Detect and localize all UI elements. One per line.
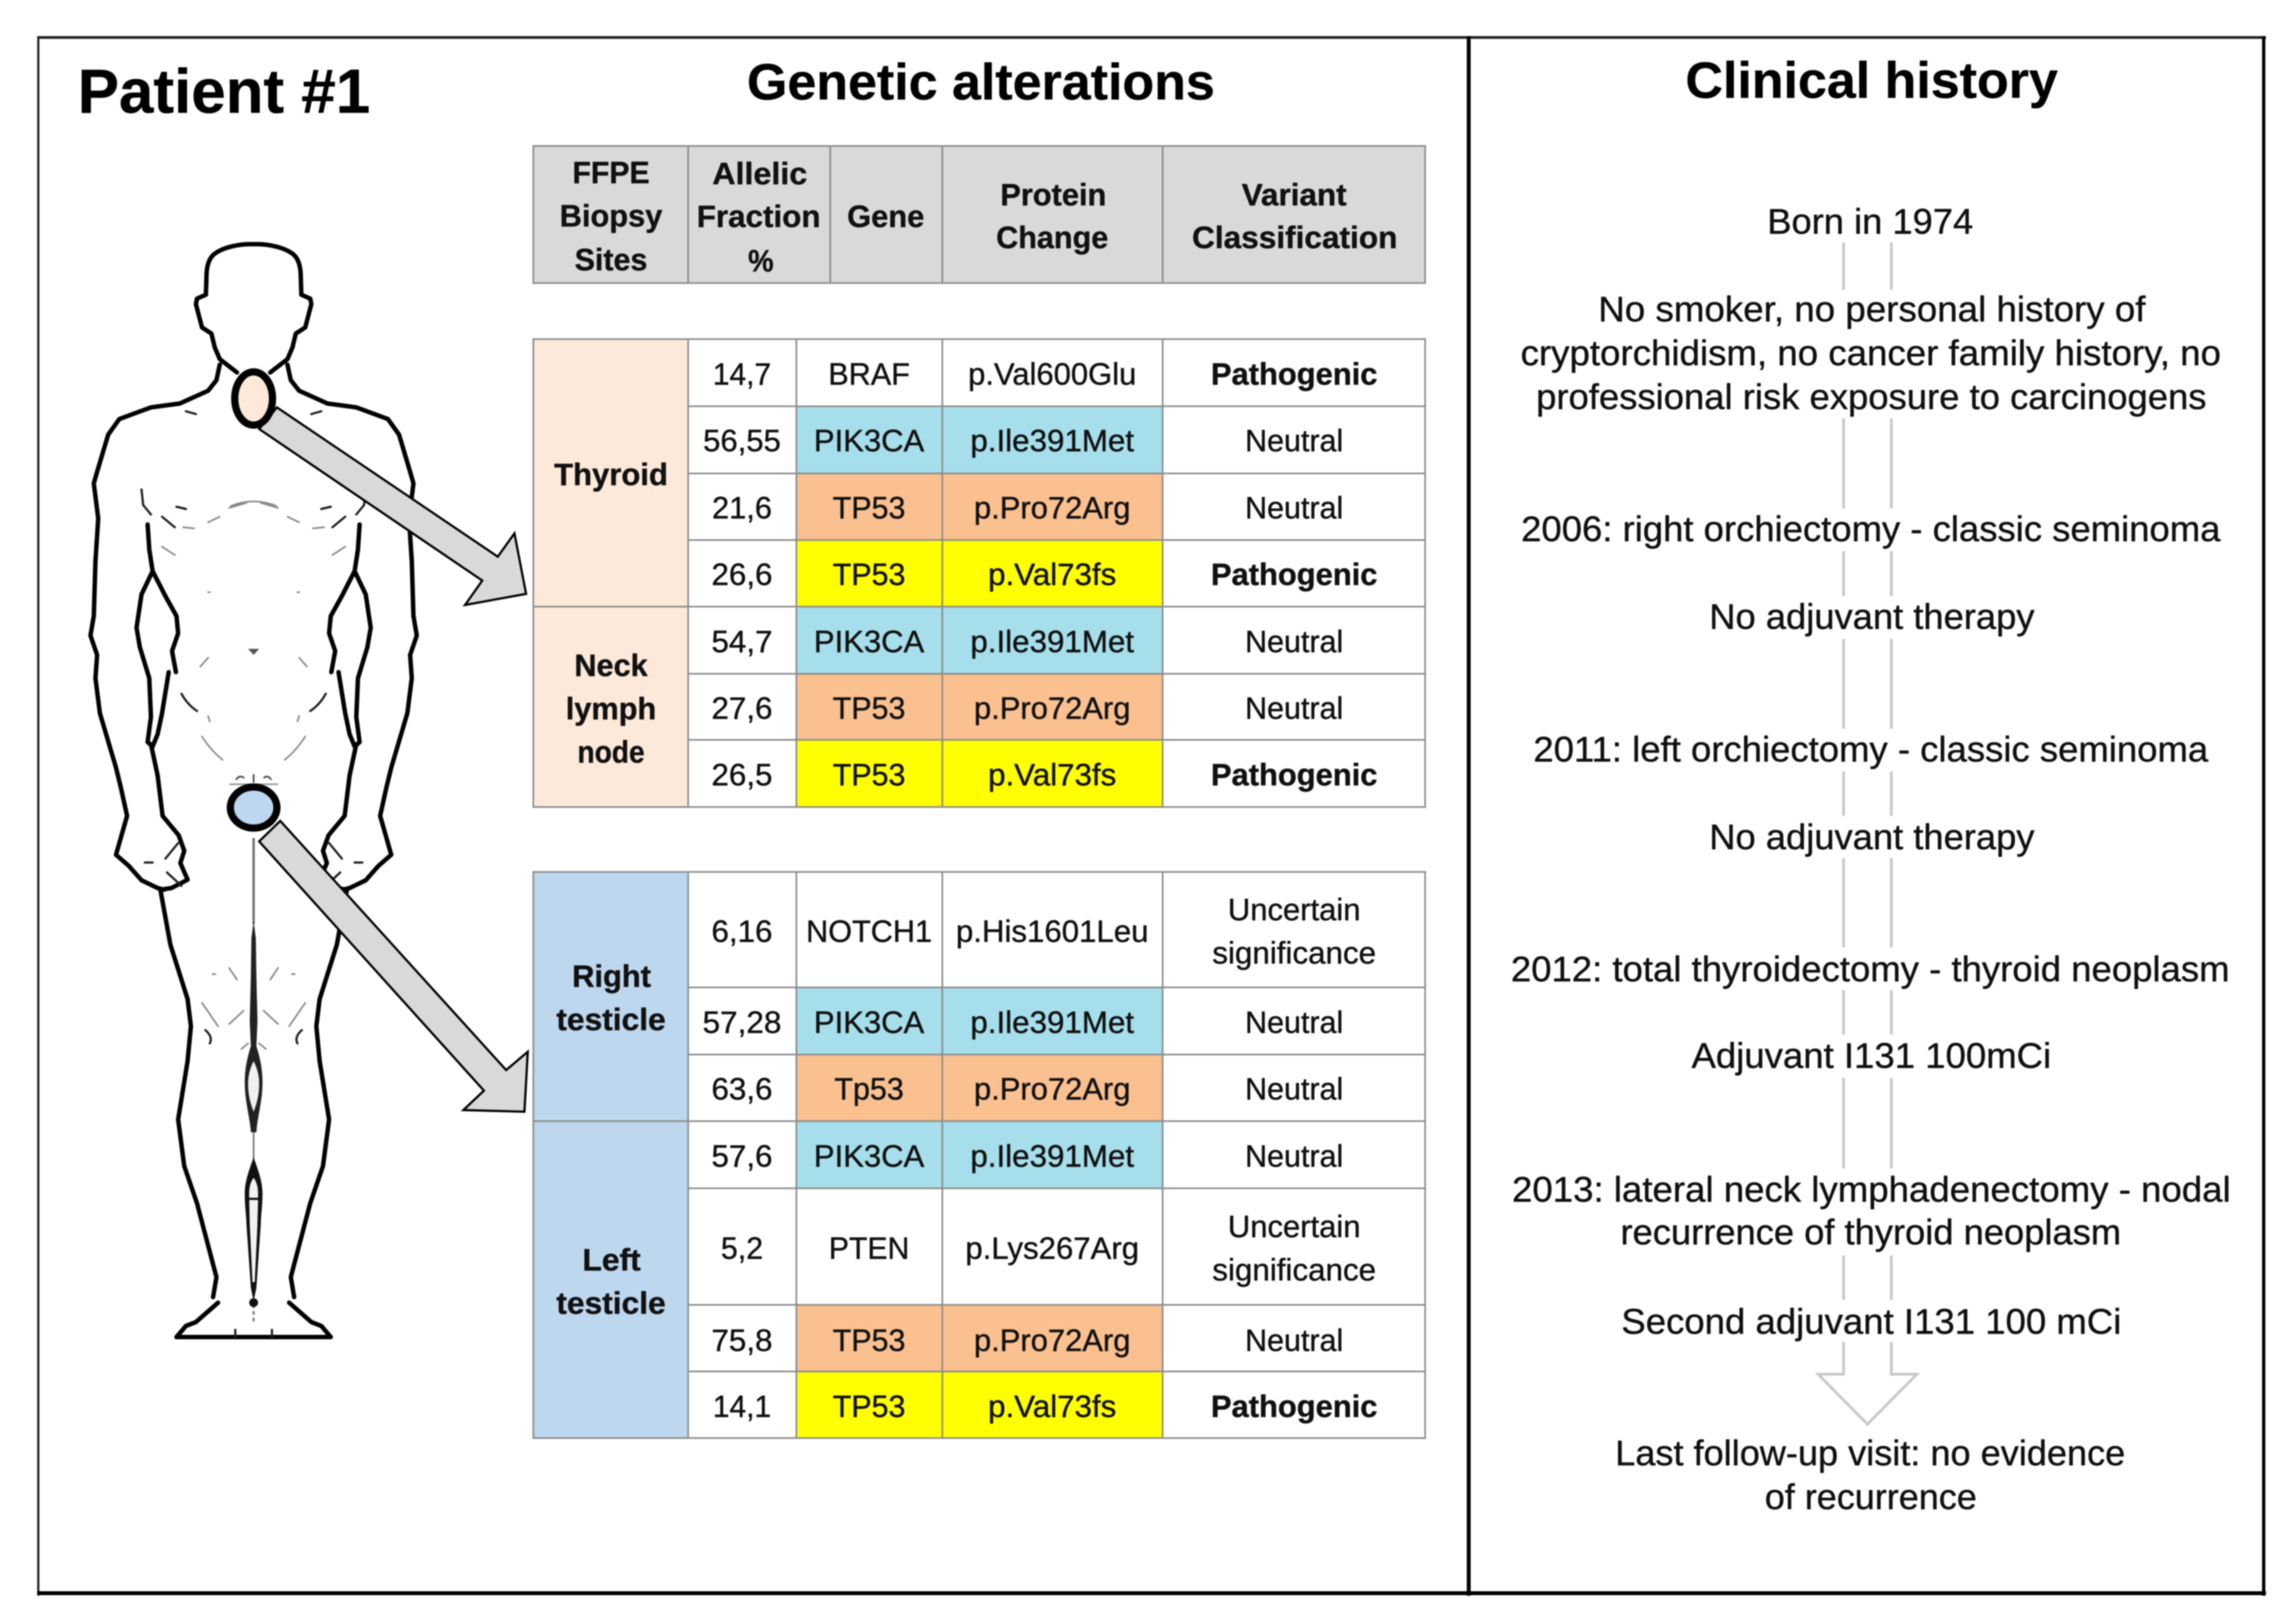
row: PIK3CA right: p.Ile391Met [970,1005,1134,1040]
row: TP53 p.Val73fs: p.Val73fs [988,557,1117,592]
row: TP53 p.Val73fs [688,540,1425,607]
heading: Clinical history: Clinical history [1685,52,2058,109]
text block: clinical history events: cryptorchidism, no cancer family history, no [1521,333,2221,373]
row: NOTCH1 [688,872,1425,987]
text block: clinical history events: No smoker, no personal history of [1598,289,2145,329]
text block: clinical history events: No adjuvant therapy [1709,597,2034,637]
table header: FFPE [573,155,649,190]
row: PIK3CA left: p.Ile391Met [970,1138,1134,1173]
row: NOTCH1: NOTCH1 [806,914,932,949]
row: PIK3CA right [688,987,1425,1055]
row: PTEN: 5,2 [721,1230,763,1265]
text block: clinical history events [1511,201,2231,1517]
site: Right testicle: Right [572,959,651,993]
row: TP53 p.Pro72Arg node: p.Pro72Arg [974,690,1130,725]
marker: thyroid site [235,372,272,425]
row: BRAF [688,339,1425,406]
row: TP53 p.Val73fs node: Pathogenic [1211,757,1377,792]
row: PIK3CA node: p.Ile391Met [970,624,1134,659]
row: Tp53 right: Neutral [1245,1071,1343,1106]
row: BRAF: BRAF [828,356,910,391]
row: TP53 p.Pro72Arg: Neutral [1245,490,1343,525]
arrow: thyroid to table [259,407,526,605]
row: PIK3CA: 56,55 [703,423,781,458]
row: BRAF: p.Val600Glu [968,356,1137,391]
row: TP53 p.Pro72Arg node: Neutral [1245,690,1343,725]
row: NOTCH1: p.His1601Leu [956,914,1149,949]
row: TP53 p.Val73fs: TP53 [832,557,906,592]
table header: Fraction [697,199,820,234]
row: NOTCH1: 6,16 [711,914,773,949]
table header: Variant [1242,177,1346,212]
row: TP53 p.Val73fs left: TP53 [832,1389,906,1424]
row: TP53 p.Val73fs node: p.Val73fs [988,757,1117,792]
row: NOTCH1: Uncertain [1228,892,1361,927]
table header: Classification [1192,220,1397,255]
arrow: clinical timeline [1818,243,1917,1424]
text block: clinical history events: Adjuvant I131 100mCi [1692,1036,2051,1076]
row: PIK3CA: p.Ile391Met [970,423,1134,458]
row: PTEN: Uncertain [1228,1209,1361,1244]
row: PTEN: significance [1212,1252,1376,1287]
site: Neck lymph node [533,607,688,807]
site: Left testicle [533,1121,688,1438]
table header: Change [996,220,1108,255]
arrow: testicles to table [259,821,528,1112]
row: PTEN: p.Lys267Arg [966,1230,1139,1265]
site: Left testicle: testicle [556,1285,666,1320]
row: Tp53 right: 63,6 [711,1071,773,1106]
text block: clinical history events: Last follow-up visit: no evidence [1615,1433,2126,1473]
row: TP53 p.Val73fs node [688,740,1425,807]
row: PIK3CA left [688,1121,1425,1188]
row: TP53 p.Pro72Arg: 21,6 [712,490,772,525]
text block: clinical history events: No adjuvant therapy [1709,817,2034,857]
text block: clinical history events: 2006: right orchiectomy - classic seminoma [1521,509,2220,549]
table: right and left testicle [533,872,1425,1438]
row: PIK3CA: PIK3CA [814,423,925,458]
row: PIK3CA left: PIK3CA [814,1138,925,1173]
table: thyroid and neck lymph node [533,339,1425,807]
center line of the legs [229,502,278,1324]
icon: human body outline [90,244,417,1337]
site: Right testicle: testicle [556,1002,666,1037]
site: Thyroid: Thyroid [554,457,668,492]
site: Neck lymph node: Neck [574,648,648,683]
row: TP53 p.Pro72Arg [688,473,1425,540]
text block: clinical history events: Second adjuvant I131 100 mCi [1622,1302,2121,1341]
row: PIK3CA node: Neutral [1245,624,1343,659]
table header: Gene [847,199,925,234]
text block: clinical history events: professional risk exposure to carcinogens [1536,377,2207,417]
marker: testicle site [230,787,277,828]
row: TP53 p.Pro72Arg node [688,674,1425,740]
row: TP53 p.Pro72Arg left: p.Pro72Arg [974,1323,1130,1358]
row: TP53 p.Pro72Arg node: TP53 [832,690,906,725]
table header: Protein [1000,177,1107,212]
site: Neck lymph node: node [577,734,645,769]
row: PTEN [688,1188,1425,1305]
row: TP53 p.Pro72Arg left: TP53 [832,1323,906,1358]
row: TP53 p.Val73fs left: p.Val73fs [988,1389,1117,1424]
row: TP53 p.Pro72Arg: TP53 [832,490,906,525]
text block: clinical history events: 2011: left orchiectomy - classic seminoma [1533,729,2208,769]
text block: clinical history events: of recurrence [1765,1477,1977,1517]
row: PIK3CA right: 57,28 [703,1005,781,1040]
row: TP53 p.Val73fs: Pathogenic [1211,557,1377,592]
row: TP53 p.Val73fs left: 14,1 [713,1389,771,1424]
site: Left testicle: Left [583,1242,640,1277]
row: PIK3CA right: Neutral [1245,1005,1343,1040]
row: PIK3CA right: PIK3CA [814,1005,925,1040]
row: TP53 p.Val73fs node: 26,5 [711,757,773,792]
table header [533,146,1425,283]
row: PIK3CA node: 54,7 [711,624,773,659]
row: Tp53 right [688,1055,1425,1121]
row: Tp53 right: Tp53 [835,1071,903,1106]
heading: Genetic alterations: Genetic alterations [747,54,1215,110]
row: TP53 p.Pro72Arg: p.Pro72Arg [974,490,1130,525]
text block: clinical history events: Born in 1974 [1767,201,1973,241]
row: TP53 p.Pro72Arg node: 27,6 [711,690,773,725]
row: TP53 p.Pro72Arg left: 75,8 [711,1323,773,1358]
site: Right testicle [533,872,688,1121]
row: PIK3CA node [688,607,1425,674]
row: NOTCH1: significance [1212,935,1376,970]
table header: Biopsy [559,198,663,233]
text block: clinical history events: recurrence of thyroid neoplasm [1620,1212,2121,1252]
row: BRAF: 14,7 [713,356,771,391]
row: TP53 p.Val73fs left [688,1371,1425,1438]
row: PIK3CA left: Neutral [1245,1138,1343,1173]
text block: clinical history events: 2013: lateral neck lymphadenectomy - nodal [1512,1169,2231,1209]
row: TP53 p.Val73fs left: Pathogenic [1211,1389,1377,1424]
site: Neck lymph node: lymph [566,691,656,726]
row: PIK3CA node: PIK3CA [814,624,925,659]
row: PTEN: PTEN [829,1230,909,1265]
row: TP53 p.Pro72Arg left [688,1305,1425,1371]
row: PIK3CA [688,406,1425,473]
table header: Sites [575,242,647,277]
row: PIK3CA: Neutral [1245,423,1343,458]
row: TP53 p.Val73fs node: TP53 [832,757,906,792]
row: Tp53 right: p.Pro72Arg [974,1071,1130,1106]
site: Thyroid [533,339,688,607]
table header: % [748,243,774,278]
row: TP53 p.Pro72Arg left: Neutral [1245,1323,1343,1358]
row: TP53 p.Val73fs: 26,6 [711,557,773,592]
text block: clinical history events: 2012: total thyroidectomy - thyroid neoplasm [1511,949,2230,989]
table header: Allelic [713,156,807,191]
row: BRAF: Pathogenic [1211,356,1377,391]
title: Patient #1: Patient #1 [78,57,370,126]
row: PIK3CA left: 57,6 [711,1138,773,1173]
